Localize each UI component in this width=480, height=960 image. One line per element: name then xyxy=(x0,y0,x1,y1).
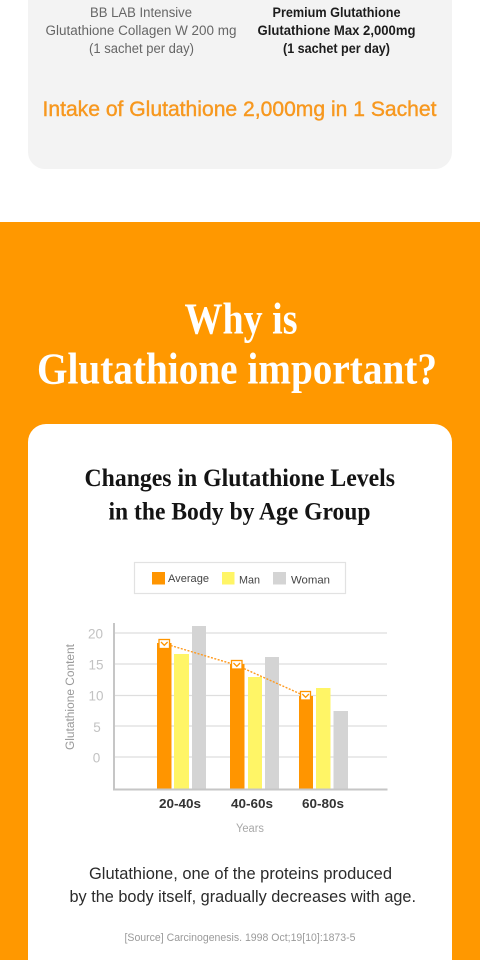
description text xyxy=(70,865,416,906)
text: premium product: Glutathione Max 2,000mg xyxy=(258,23,416,38)
bars: 40-60s xyxy=(230,657,279,789)
legend: Average xyxy=(168,573,209,585)
y axis values: 20 xyxy=(88,626,103,642)
x axis title: Years xyxy=(236,823,264,835)
panel: white card xyxy=(28,424,452,960)
bars: 60-80s xyxy=(299,688,348,789)
y axis values: 15 xyxy=(88,658,104,672)
heading: why is glutathione important xyxy=(37,294,437,394)
text: premium product: Premium Glutathione xyxy=(272,5,401,20)
chart title: Changes in Glutathione Levels xyxy=(84,463,395,492)
y axis values: 10 xyxy=(88,688,104,704)
trend line xyxy=(164,644,305,696)
x axis labels xyxy=(159,796,344,811)
description text: by the body itself, gradually decreases with age. xyxy=(70,888,416,906)
panel: orange background xyxy=(0,222,480,960)
y axis title: Glutathione Content xyxy=(65,643,77,750)
text: BB LAB product: BB LAB Intensive xyxy=(90,5,192,20)
source note: [Source] Carcinogenesis. 1998 Oct;19[10]:1873-5 xyxy=(124,932,356,944)
text: BB LAB product: (1 sachet per day) xyxy=(89,41,194,56)
chart title xyxy=(84,463,395,526)
y axis values: 0 xyxy=(93,750,100,766)
x axis labels: 20-40s xyxy=(159,796,201,811)
heading: why is glutathione important: Why is xyxy=(184,294,298,344)
x axis labels: 40-60s xyxy=(231,796,273,811)
heading: why is glutathione important: Glutathione important? xyxy=(37,344,437,394)
bar chart xyxy=(65,623,388,835)
bars: 20-40s xyxy=(157,626,206,789)
text: BB LAB product: Glutathione Collagen W 200 mg xyxy=(46,23,236,38)
x axis labels: 60-80s xyxy=(302,796,344,811)
legend xyxy=(134,562,346,594)
text: BB LAB product xyxy=(46,5,236,56)
y axis values xyxy=(88,626,104,766)
panel: glutathione comparison xyxy=(28,0,452,169)
text: premium product xyxy=(258,5,416,56)
callout: intake: Intake of Glutathione 2,000mg in 1 Sachet xyxy=(42,98,437,121)
chart title: in the Body by Age Group xyxy=(108,496,370,526)
description text: Glutathione, one of the proteins produced xyxy=(89,865,392,883)
text: premium product: (1 sachet per day) xyxy=(283,41,390,56)
legend: Woman xyxy=(291,574,330,586)
y axis values: 5 xyxy=(93,720,101,735)
legend: Man xyxy=(239,574,260,586)
trend markers xyxy=(159,640,310,700)
